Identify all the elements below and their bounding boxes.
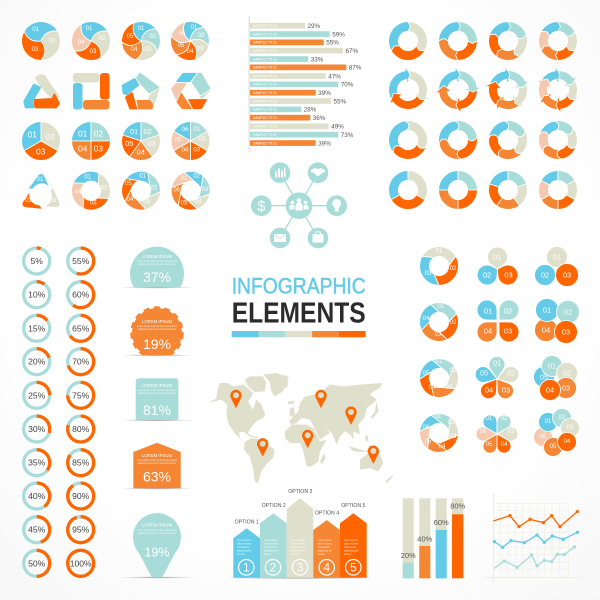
arrow option 2: OPTION 2 (262, 503, 286, 509)
iris with 5 parts: 02 (151, 185, 158, 191)
badge: starburst 19% (119, 308, 195, 358)
icon: handshake node (308, 162, 328, 183)
swirl with 4 parts: 04 (78, 40, 85, 46)
pie with 3 parts (16, 117, 66, 160)
swirl with 5 parts: 05 (127, 34, 134, 40)
iris with 5 parts: 05 (125, 181, 132, 187)
arrow option 1: consectetur (237, 546, 250, 549)
pie with 5 parts: 04 (137, 148, 145, 156)
plain donut row (383, 166, 577, 213)
badge: house 63%: LOREM IPSUM (142, 453, 172, 458)
bar rows: 70% (341, 82, 354, 89)
pie with 5 parts: 01 (130, 127, 138, 136)
four leaves (477, 300, 519, 342)
swirl with 6 parts: 01 (191, 25, 198, 31)
arrow option 5: 5 (350, 560, 357, 574)
iris with 4 parts: 04 (75, 190, 82, 196)
chart grid and axes (485, 493, 580, 583)
iris ring six parts: 02 (448, 420, 455, 426)
pie with 3 parts: 02 (45, 132, 55, 142)
arrow option 2: sed do (264, 553, 272, 556)
icon: bar chart node (270, 162, 290, 183)
bar rows: SAMPLE TITLE (253, 74, 278, 78)
panel: percent progress rings: 85% (72, 458, 90, 468)
iris ring five parts: 02 (450, 368, 457, 374)
world map: americas (208, 373, 295, 483)
iris with 6 parts: 03 (202, 187, 209, 193)
arrow option 3: adipiscing elit (291, 550, 306, 552)
pie with 6 parts: 02 (199, 137, 206, 143)
three teardrops: 02 (483, 270, 491, 280)
iris with 3 parts (17, 174, 66, 217)
bar rows: SAMPLE TITLE (253, 125, 278, 129)
bar rows: 59% (332, 31, 345, 38)
swirl with 4 parts: 02 (99, 36, 106, 42)
arrow option 4: dolor sit amet (318, 542, 332, 546)
hub connector lines (261, 173, 337, 238)
panel: pie charts (16, 117, 210, 164)
swirl with 4 parts (69, 19, 113, 63)
three overlapping circles (534, 246, 578, 286)
arrow option 1: dolor sit amet (237, 542, 252, 546)
blue line (493, 531, 579, 549)
iris ring six parts (417, 413, 461, 453)
bar rows: 36% (313, 115, 326, 122)
title (232, 273, 366, 337)
iris with 3 parts: 03 (25, 198, 32, 204)
icon: light bulb node (326, 195, 347, 216)
square pinwheel (73, 73, 110, 110)
badge: starburst 19%: Adipiscing elit sed do eiusmod tempor (138, 328, 177, 331)
iris with 5 parts: 04 (127, 197, 134, 203)
swirl with 5 parts: 04 (131, 47, 138, 53)
arrow option 1: adipiscing elit (237, 550, 252, 552)
panel: percent progress rings: 20% (28, 357, 46, 367)
five petals: 05 (480, 368, 488, 378)
panel: percentage badges (119, 247, 195, 579)
panel: polygon pinwheels (24, 73, 210, 110)
arrow option 5: consectetur (344, 546, 357, 549)
panel: hub network diagram (251, 162, 347, 248)
bar rows: SAMPLE TITLE (253, 32, 278, 36)
three overlapping circles: 01 (553, 252, 561, 262)
panel: percent progress rings: 70% (72, 357, 90, 367)
arrow option 2 (260, 503, 287, 578)
icon: dollar node: $ (257, 198, 266, 215)
iris ring five parts: 04 (429, 385, 436, 391)
title colour bar (232, 331, 366, 337)
four leaves: 01 (484, 306, 492, 316)
arrow option 1: OPTION 1 (235, 520, 259, 526)
five petals: 04 (485, 386, 493, 394)
arrow option 5 (340, 503, 367, 578)
swirl with 3 parts: 03 (32, 47, 39, 53)
world map: eurasia africa oceania (285, 375, 393, 483)
panel: percent progress rings: 95% (72, 525, 90, 535)
panel: percent progress rings: 50% (28, 558, 46, 568)
iris with 4 parts (68, 168, 114, 214)
panel: vertical bar chart: 20% (401, 551, 416, 560)
badge: pin 19%: LOREM IPSUM (142, 522, 172, 528)
six overlapping circles: 02 (559, 415, 566, 421)
panel: line chart (485, 493, 580, 583)
bar rows: 47% (328, 73, 341, 80)
four overlapping circles: 02 (564, 308, 572, 316)
iris ring six parts: 05 (425, 439, 432, 445)
arrow option 3: consectetur (291, 546, 304, 549)
bar rows: 33% (311, 56, 324, 63)
arrow option 5: OPTION 5 (341, 503, 366, 509)
iris ring six parts: 03 (450, 434, 457, 440)
pie with 4 parts: 01 (78, 128, 88, 138)
bar rows: SAMPLE TITLE (253, 116, 278, 120)
iris ring five parts: 05 (423, 371, 430, 377)
iris with 3 parts: 02 (50, 198, 57, 204)
arrow option 3: dolor sit amet (291, 542, 306, 546)
six petals: 05 (486, 442, 493, 448)
arrow option 2: Lorem ipsum (264, 539, 278, 542)
iris ring six parts: 06 (423, 425, 430, 431)
six petals: 03 (508, 429, 515, 435)
badge: rounded card 81%: 81% (143, 402, 171, 418)
hexagon pinwheel (172, 73, 210, 109)
swirl with 6 parts: 05 (178, 43, 185, 49)
bar rows: SAMPLE TITLE (253, 24, 278, 28)
arrow option 2: adipiscing elit (264, 550, 279, 552)
five overlapping circles: 04 (546, 386, 554, 394)
swirl with 6 parts: 04 (187, 49, 194, 55)
badge: house 63% (119, 443, 195, 490)
six petals: 02 (501, 416, 508, 422)
arrow option 4 (313, 510, 340, 578)
badge: dome 37%: 37% (143, 269, 171, 285)
arrows ground shadow (220, 577, 380, 579)
iris ring four parts (416, 299, 462, 345)
swirl with 4 parts: 01 (86, 26, 93, 32)
swirl with 5 parts: 01 (138, 26, 145, 32)
six overlapping circles: 01 (545, 419, 552, 425)
iris ring four parts: 04 (423, 316, 430, 322)
bar rows: SAMPLE TITLE (253, 141, 278, 145)
panel: vertical bar chart: 80% (450, 502, 466, 510)
panel: percent progress rings: 100% (70, 558, 92, 568)
panel: percent progress rings: 55% (72, 256, 90, 266)
arrow ring row (383, 64, 580, 114)
badge: pin 19%: Adipiscing elit sed do eiusmod tempor (138, 532, 177, 535)
panel: percent progress rings: 15% (28, 323, 46, 333)
panel: percent progress rings: 65% (72, 323, 90, 333)
bar rows: SAMPLE TITLE (253, 108, 278, 112)
triangle pinwheel (24, 75, 59, 107)
iris with 6 parts (169, 170, 212, 211)
pie with 4 parts: 03 (94, 143, 103, 153)
pie with 3 parts: 03 (36, 147, 46, 157)
bar rows: 67% (346, 48, 359, 55)
badge: pin 19%: Lorem ipsum dolor sit amet consectetur (137, 529, 177, 532)
bar rows: SAMPLE TITLE (253, 49, 278, 53)
panel: percent progress rings: 25% (28, 390, 46, 400)
pie with 4 parts: 02 (94, 128, 103, 138)
panel: vertical bar chart: 40% (417, 534, 433, 544)
badge: starburst 19%: LOREM IPSUM (142, 319, 172, 324)
panel: donut charts with chevrons (382, 17, 580, 213)
pie with 5 parts: 02 (144, 127, 152, 136)
rounded ring row (382, 114, 580, 166)
pie with 6 parts (171, 119, 210, 163)
arrow option 3: OPTION 3 (288, 489, 313, 495)
panel: percent progress rings: 5% (30, 256, 43, 266)
arrow option 4: sed do (318, 553, 325, 556)
bar rows: 73% (341, 132, 354, 139)
six petals: 04 (501, 442, 508, 448)
iris ring three parts: 02 (450, 266, 457, 272)
six overlapping circles: 04 (564, 439, 571, 445)
iris ring five parts: 01 (436, 359, 443, 365)
panel: swirl pie diagrams (16, 19, 211, 65)
iris with 5 parts: 01 (139, 174, 147, 180)
arrow option 2: 2 (270, 560, 277, 574)
arrow option 4: 4 (323, 560, 330, 574)
pie with 6 parts: 03 (193, 148, 201, 154)
panel: percent progress rings: 40% (28, 491, 46, 501)
badge: house 63%: Adipiscing elit sed do eiusmod tempor (138, 462, 177, 465)
swirl with 5 parts: 02 (149, 34, 157, 40)
iris ring three parts: 01 (436, 249, 443, 255)
iris with 5 parts (121, 169, 163, 213)
pie with 6 parts: 04 (182, 148, 189, 154)
swirl with 5 parts (119, 19, 161, 63)
swirl with 3 parts: 02 (49, 39, 56, 45)
panel: vertical bar chart: 60% (434, 518, 449, 527)
bar rows (250, 23, 362, 147)
arrow option 5: adipiscing elit (344, 550, 359, 552)
bar rows: SAMPLE TITLE (253, 41, 278, 45)
arrow option 4: Lorem ipsum (318, 539, 331, 542)
iris with 3 parts: 01 (37, 177, 44, 183)
iris with 6 parts: 02 (193, 174, 201, 180)
bar rows: SAMPLE TITLE (253, 91, 278, 95)
swirl with 5 parts: 03 (145, 47, 152, 53)
arrow option 3: sed do (291, 553, 299, 556)
pie with 4 parts (68, 118, 114, 164)
iris with 6 parts: 04 (195, 199, 202, 205)
panel: vertical bar chart (401, 498, 466, 578)
iris ring five parts (417, 356, 459, 400)
pie with 3 parts: 01 (28, 129, 37, 139)
bar rows: SAMPLE TITLE (253, 133, 278, 137)
five petals (473, 357, 521, 402)
pie with 5 parts (119, 119, 163, 160)
five overlapping circles: 05 (540, 372, 548, 382)
four overlapping circles: 01 (543, 306, 551, 314)
bar rows: 55% (334, 98, 347, 105)
iris with 6 parts: 01 (181, 176, 188, 182)
five petals: 03 (502, 386, 510, 394)
panel: percent progress rings: 35% (28, 458, 46, 468)
five petals: 02 (507, 368, 515, 378)
bar rows: 29% (308, 23, 321, 30)
iris ring four parts: 03 (435, 332, 442, 338)
six petals (476, 412, 518, 456)
iris ring six parts: 04 (439, 444, 446, 450)
five overlapping circles: 03 (562, 384, 570, 392)
four leaves: 03 (504, 326, 512, 336)
arrow option 5: dolor sit amet (344, 542, 359, 546)
panel: option arrows (220, 489, 380, 579)
panel: percent progress rings: 75% (72, 390, 90, 400)
four leaves: 04 (484, 326, 492, 336)
five overlapping circles (534, 356, 578, 400)
arrow option 4: adipiscing elit (318, 550, 332, 552)
bar rows: 39% (318, 140, 331, 147)
arrow option 4: consectetur (318, 546, 330, 549)
badge: pin 19%: 19% (144, 546, 170, 560)
arrow option 4: OPTION 4 (315, 510, 339, 516)
badge: dome 37%: Adipiscing elit sed do eiusmod tempor (138, 263, 177, 266)
panel: percent progress rings: 60% (72, 290, 90, 300)
panel: world map with pins (208, 373, 393, 483)
six overlapping circles: 03 (567, 425, 574, 431)
arrow option 1: Lorem ipsum (237, 539, 251, 542)
bar rows: SAMPLE TITLE (253, 57, 278, 61)
three teardrops: 01 (493, 252, 501, 262)
panel: percent progress rings: 10% (28, 290, 46, 300)
five overlapping circles: 01 (548, 362, 556, 370)
six overlapping circles: 05 (550, 444, 557, 450)
badge: rounded card 81%: LOREM IPSUM (142, 383, 172, 388)
badge: dome 37%: Lorem ipsum dolor sit amet consectetur (137, 260, 177, 263)
arrow option 3: 3 (297, 560, 304, 574)
badge: starburst 19%: Lorem ipsum dolor sit amet consectetur (137, 325, 177, 328)
badge: pin 19% (119, 513, 195, 578)
arrow option 3: Lorem ipsum (291, 539, 305, 542)
bar rows: 49% (331, 124, 344, 131)
icon: people hub (286, 192, 312, 219)
pie with 5 parts: 05 (125, 139, 133, 148)
map pins (230, 390, 379, 464)
six overlapping circles: 06 (540, 434, 547, 440)
chevron ring row (383, 17, 577, 64)
swirl with 3 parts: 01 (32, 27, 40, 33)
iris with 4 parts: 03 (90, 200, 97, 206)
swirl with 6 parts: 06 (179, 31, 186, 37)
four overlapping circles: 03 (562, 328, 570, 336)
panel: percent progress rings: 45% (28, 525, 46, 535)
arrow option 1: sed do (237, 553, 245, 556)
bar rows: 55% (326, 40, 339, 47)
badge: dome 37% (119, 247, 195, 288)
iris with 4 parts: 02 (101, 185, 108, 191)
pie with 4 parts: 04 (78, 143, 88, 153)
swirl with 6 parts (169, 20, 211, 62)
orange line (493, 510, 579, 528)
bar rows: SAMPLE TITLE (253, 99, 278, 103)
teal line (494, 545, 576, 569)
badge: house 63%: Lorem ipsum dolor sit amet consectetur (137, 459, 177, 462)
iris with 4 parts: 01 (84, 175, 92, 181)
iris ring four parts: 01 (438, 304, 445, 310)
iris with 5 parts: 03 (143, 199, 151, 205)
panel: percent progress rings: 80% (72, 424, 90, 434)
six overlapping circles (534, 408, 580, 456)
iris with 6 parts: 05 (181, 200, 188, 206)
pie with 6 parts: 01 (193, 127, 201, 133)
arrow option 5: sed do (344, 553, 352, 556)
four overlapping circles (534, 298, 580, 344)
three overlapping circles: 03 (563, 270, 571, 280)
bar rows: SAMPLE TITLE (253, 66, 278, 70)
badge: dome 37%: LOREM IPSUM (142, 254, 172, 259)
iris ring three parts: 03 (425, 271, 432, 277)
four leaves: 02 (504, 306, 512, 316)
panel: percent progress rings (24, 248, 94, 576)
arrow option 2: dolor sit amet (264, 542, 279, 546)
panel: percent progress rings: 90% (72, 491, 90, 501)
arrow option 2: consectetur (264, 546, 277, 549)
pie with 6 parts: 06 (182, 127, 189, 133)
badge: starburst 19%: 19% (143, 336, 171, 352)
pie with 6 parts: 05 (175, 138, 182, 144)
iris ring three parts (414, 247, 464, 290)
swirl with 4 parts: 03 (90, 49, 97, 55)
badge: rounded card 81%: Lorem ipsum dolor sit amet consectetur (137, 389, 177, 392)
six petals: 06 (480, 429, 487, 435)
badge: house 63%: 63% (143, 469, 171, 485)
icon: mail node (270, 228, 290, 248)
six petals: 01 (486, 416, 493, 422)
iris ring five parts: 03 (446, 385, 453, 391)
swirl with 6 parts: 03 (197, 46, 204, 52)
three overlapping circles: 02 (541, 270, 549, 280)
three teardrops (473, 247, 522, 289)
panel: percent progress rings: 30% (28, 424, 46, 434)
bar rows: 87% (349, 65, 362, 72)
title line: elements: ELEMENTS (232, 297, 366, 329)
badge: rounded card 81% (119, 378, 195, 421)
panel: iris rings (17, 168, 212, 217)
panel: circular options lower right (414, 246, 580, 456)
arrow option 3 (287, 489, 313, 578)
icon: briefcase node (308, 228, 328, 248)
swirl with 6 parts: 02 (198, 33, 205, 39)
pie with 5 parts: 03 (148, 139, 156, 148)
iris ring six parts: 01 (435, 414, 442, 420)
title line: infographic: INFOGRAPHIC (232, 273, 366, 298)
bar rows: 39% (318, 90, 331, 97)
bar rows: 28% (304, 107, 317, 114)
arrow option 5: Lorem ipsum (344, 539, 358, 542)
iris ring four parts: 02 (450, 320, 457, 326)
swirl with 3 parts (16, 22, 66, 65)
four overlapping circles: 04 (542, 326, 550, 334)
bar chart left shadow (248, 16, 250, 152)
iris with 6 parts: 06 (173, 188, 181, 194)
five overlapping circles: 02 (563, 368, 571, 378)
five petals: 01 (493, 358, 501, 368)
badge: rounded card 81%: Adipiscing elit sed do eiusmod tempor (138, 392, 177, 395)
panel: horizontal bar chart (248, 16, 362, 152)
bar rows: SAMPLE TITLE (253, 83, 278, 87)
arrow option 1 (233, 520, 260, 578)
pentagon pinwheel (122, 73, 159, 109)
arrow option 1: 1 (243, 560, 250, 574)
three teardrops: 03 (504, 270, 513, 280)
